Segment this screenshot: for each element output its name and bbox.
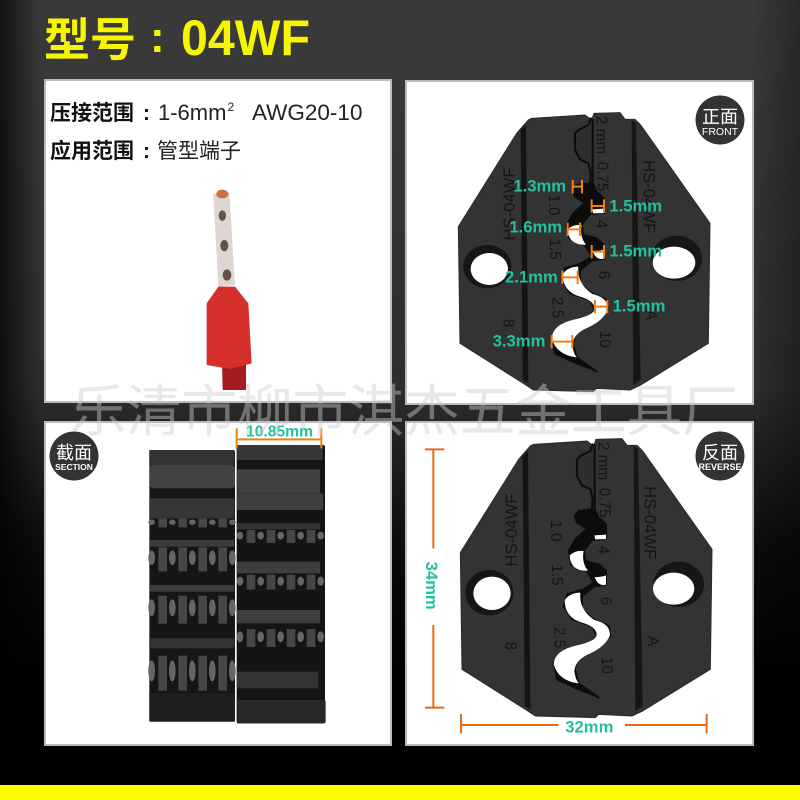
die engravings: 2 mm <box>593 116 610 154</box>
dimension: height <box>422 449 444 708</box>
measurement labels: 1.5mm <box>613 296 665 315</box>
measurement labels: 3.3mm <box>493 331 545 350</box>
die engravings: 0.75 <box>593 162 610 192</box>
measurement labels: 1.3mm <box>513 176 566 195</box>
title: 型号 <box>44 14 136 66</box>
die engravings: 0.75 <box>595 488 612 518</box>
die engravings: 2.5 <box>549 297 566 318</box>
measurement labels: 1.5mm <box>609 241 662 260</box>
die engravings: 1.0 <box>545 194 562 216</box>
badge: front: FRONT <box>702 126 739 138</box>
badge: reverse: REVERSE <box>698 462 742 472</box>
measurement labels: 2.1mm <box>505 267 558 286</box>
die engravings: 6 <box>595 271 612 279</box>
die front <box>458 113 710 392</box>
measurement marks <box>552 180 607 348</box>
crimp range text: AWG20-10 <box>252 100 362 125</box>
watermark: 乐清市柳市淇杰五金工具厂 <box>70 380 738 443</box>
die engravings: 10 <box>596 331 613 348</box>
die engravings: 1.5 <box>546 238 563 260</box>
panel: crimping range and ferrule <box>45 80 391 402</box>
crimp range text: 1-6mm <box>158 100 226 125</box>
die engravings: A <box>642 310 659 321</box>
die section blocks <box>148 424 326 723</box>
die engravings: HS-04WF <box>641 486 660 559</box>
die engravings: HS-04WF <box>639 160 658 233</box>
panel: reverse view <box>406 422 753 745</box>
right block <box>237 445 326 723</box>
die engravings: 4 <box>595 546 612 555</box>
bottom yellow band <box>0 785 800 800</box>
badge: reverse: 反面 <box>702 443 738 463</box>
die engravings: 6 <box>597 597 614 605</box>
crimp range text: : <box>143 102 150 125</box>
badge: front <box>696 96 744 144</box>
ferrule terminal <box>207 190 252 390</box>
panel: front view <box>406 81 753 404</box>
left block <box>148 450 236 722</box>
measurement labels <box>493 176 665 350</box>
badge: front: 正面 <box>702 107 738 127</box>
die engravings <box>501 442 661 674</box>
badge: reverse <box>696 432 744 480</box>
die engravings: 1.0 <box>547 520 564 542</box>
crimp range text: 2 <box>227 100 234 114</box>
die reverse <box>460 439 712 718</box>
title: : <box>150 13 165 62</box>
die engravings: 2.5 <box>551 627 568 648</box>
application text: 管型端子 <box>157 140 241 163</box>
badge: section <box>50 432 98 480</box>
measurement labels: 1.6mm <box>509 217 562 236</box>
die engravings: 10 <box>598 657 615 674</box>
title <box>44 10 310 66</box>
width label: 10.85mm <box>246 424 313 441</box>
die engravings: 1.5 <box>548 564 565 586</box>
dimension: width: 32mm <box>565 718 613 737</box>
die engravings: 2 mm <box>595 442 612 480</box>
dimension: width <box>461 714 707 737</box>
die engravings: 8 <box>501 642 518 650</box>
badge: section: 截面 <box>56 443 92 463</box>
measurement labels: 1.5mm <box>609 196 662 215</box>
crimp range text: 压接范围 <box>50 102 134 125</box>
die engravings: 4 <box>593 220 610 229</box>
die engravings: HS-04WF <box>502 493 521 567</box>
die engravings: 8 <box>499 319 516 328</box>
dimension: height: 34mm <box>422 562 441 610</box>
die engravings: A <box>644 636 661 647</box>
width mark <box>237 428 321 448</box>
application text: 应用范围 <box>50 139 134 163</box>
application text: : <box>143 140 150 163</box>
die engravings: HS-04WF <box>500 167 519 241</box>
title: 04WF <box>181 10 310 66</box>
die engravings <box>499 116 659 348</box>
panel: section view <box>45 422 391 745</box>
badge: section: SECTION <box>55 462 93 472</box>
